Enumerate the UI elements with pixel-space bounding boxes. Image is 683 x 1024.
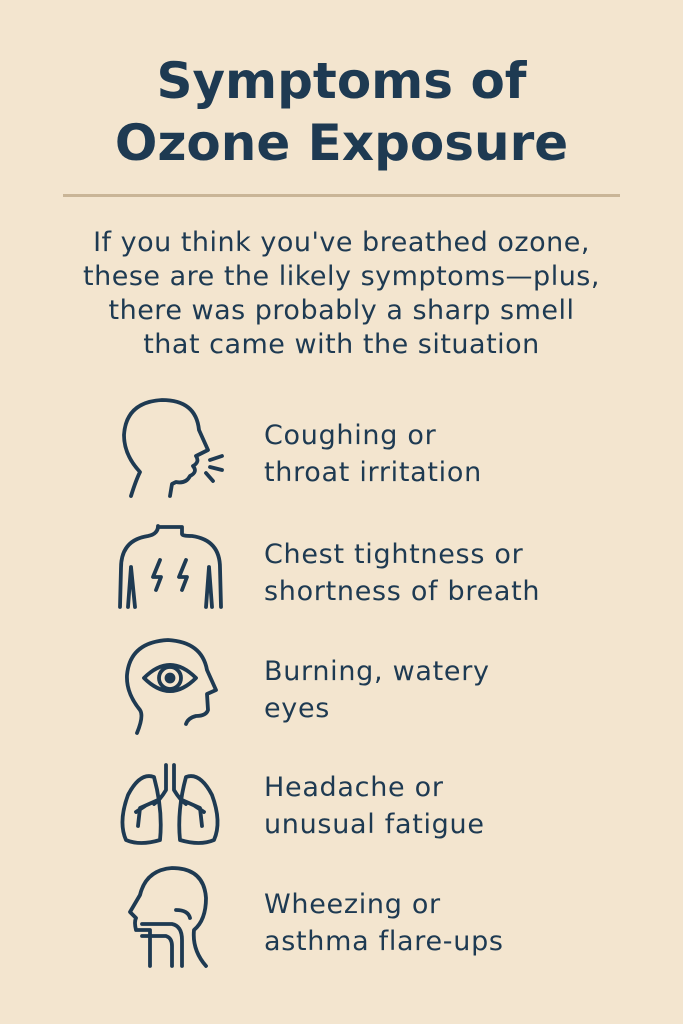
item text: coughing [264,420,482,488]
item text: chest: shortness of breath [264,576,540,607]
icon: throat head [130,868,206,966]
item text: coughing: throat irritation [264,457,482,488]
item text: coughing: Coughing or [264,420,436,451]
subtitle: these are the likely symptoms—plus, [83,261,600,292]
icon: eye head [127,640,216,733]
item text: headache [264,772,485,840]
title: Symptoms of [156,52,527,110]
item text: eyes: eyes [264,693,330,724]
subtitle: If you think you've breathed ozone, [93,227,590,258]
subtitle [83,227,600,360]
item text: headache: Headache or [264,772,444,803]
item text: wheezing: Wheezing or [264,889,441,920]
subtitle: there was probably a sharp smell [108,295,574,326]
icon: chest torso [120,526,221,607]
item text: wheezing [264,889,504,957]
item text: chest [264,539,540,607]
item text: eyes: Burning, watery [264,656,490,687]
item text: eyes [264,656,490,724]
title: Ozone Exposure [115,114,568,172]
item text: wheezing: asthma flare-ups [264,926,504,957]
item text: chest: Chest tightness or [264,539,523,570]
icon: lungs [122,765,218,843]
title [115,52,568,172]
subtitle: that came with the situation [143,329,540,360]
icon: coughing head [124,400,222,496]
item text: headache: unusual fatigue [264,809,485,840]
